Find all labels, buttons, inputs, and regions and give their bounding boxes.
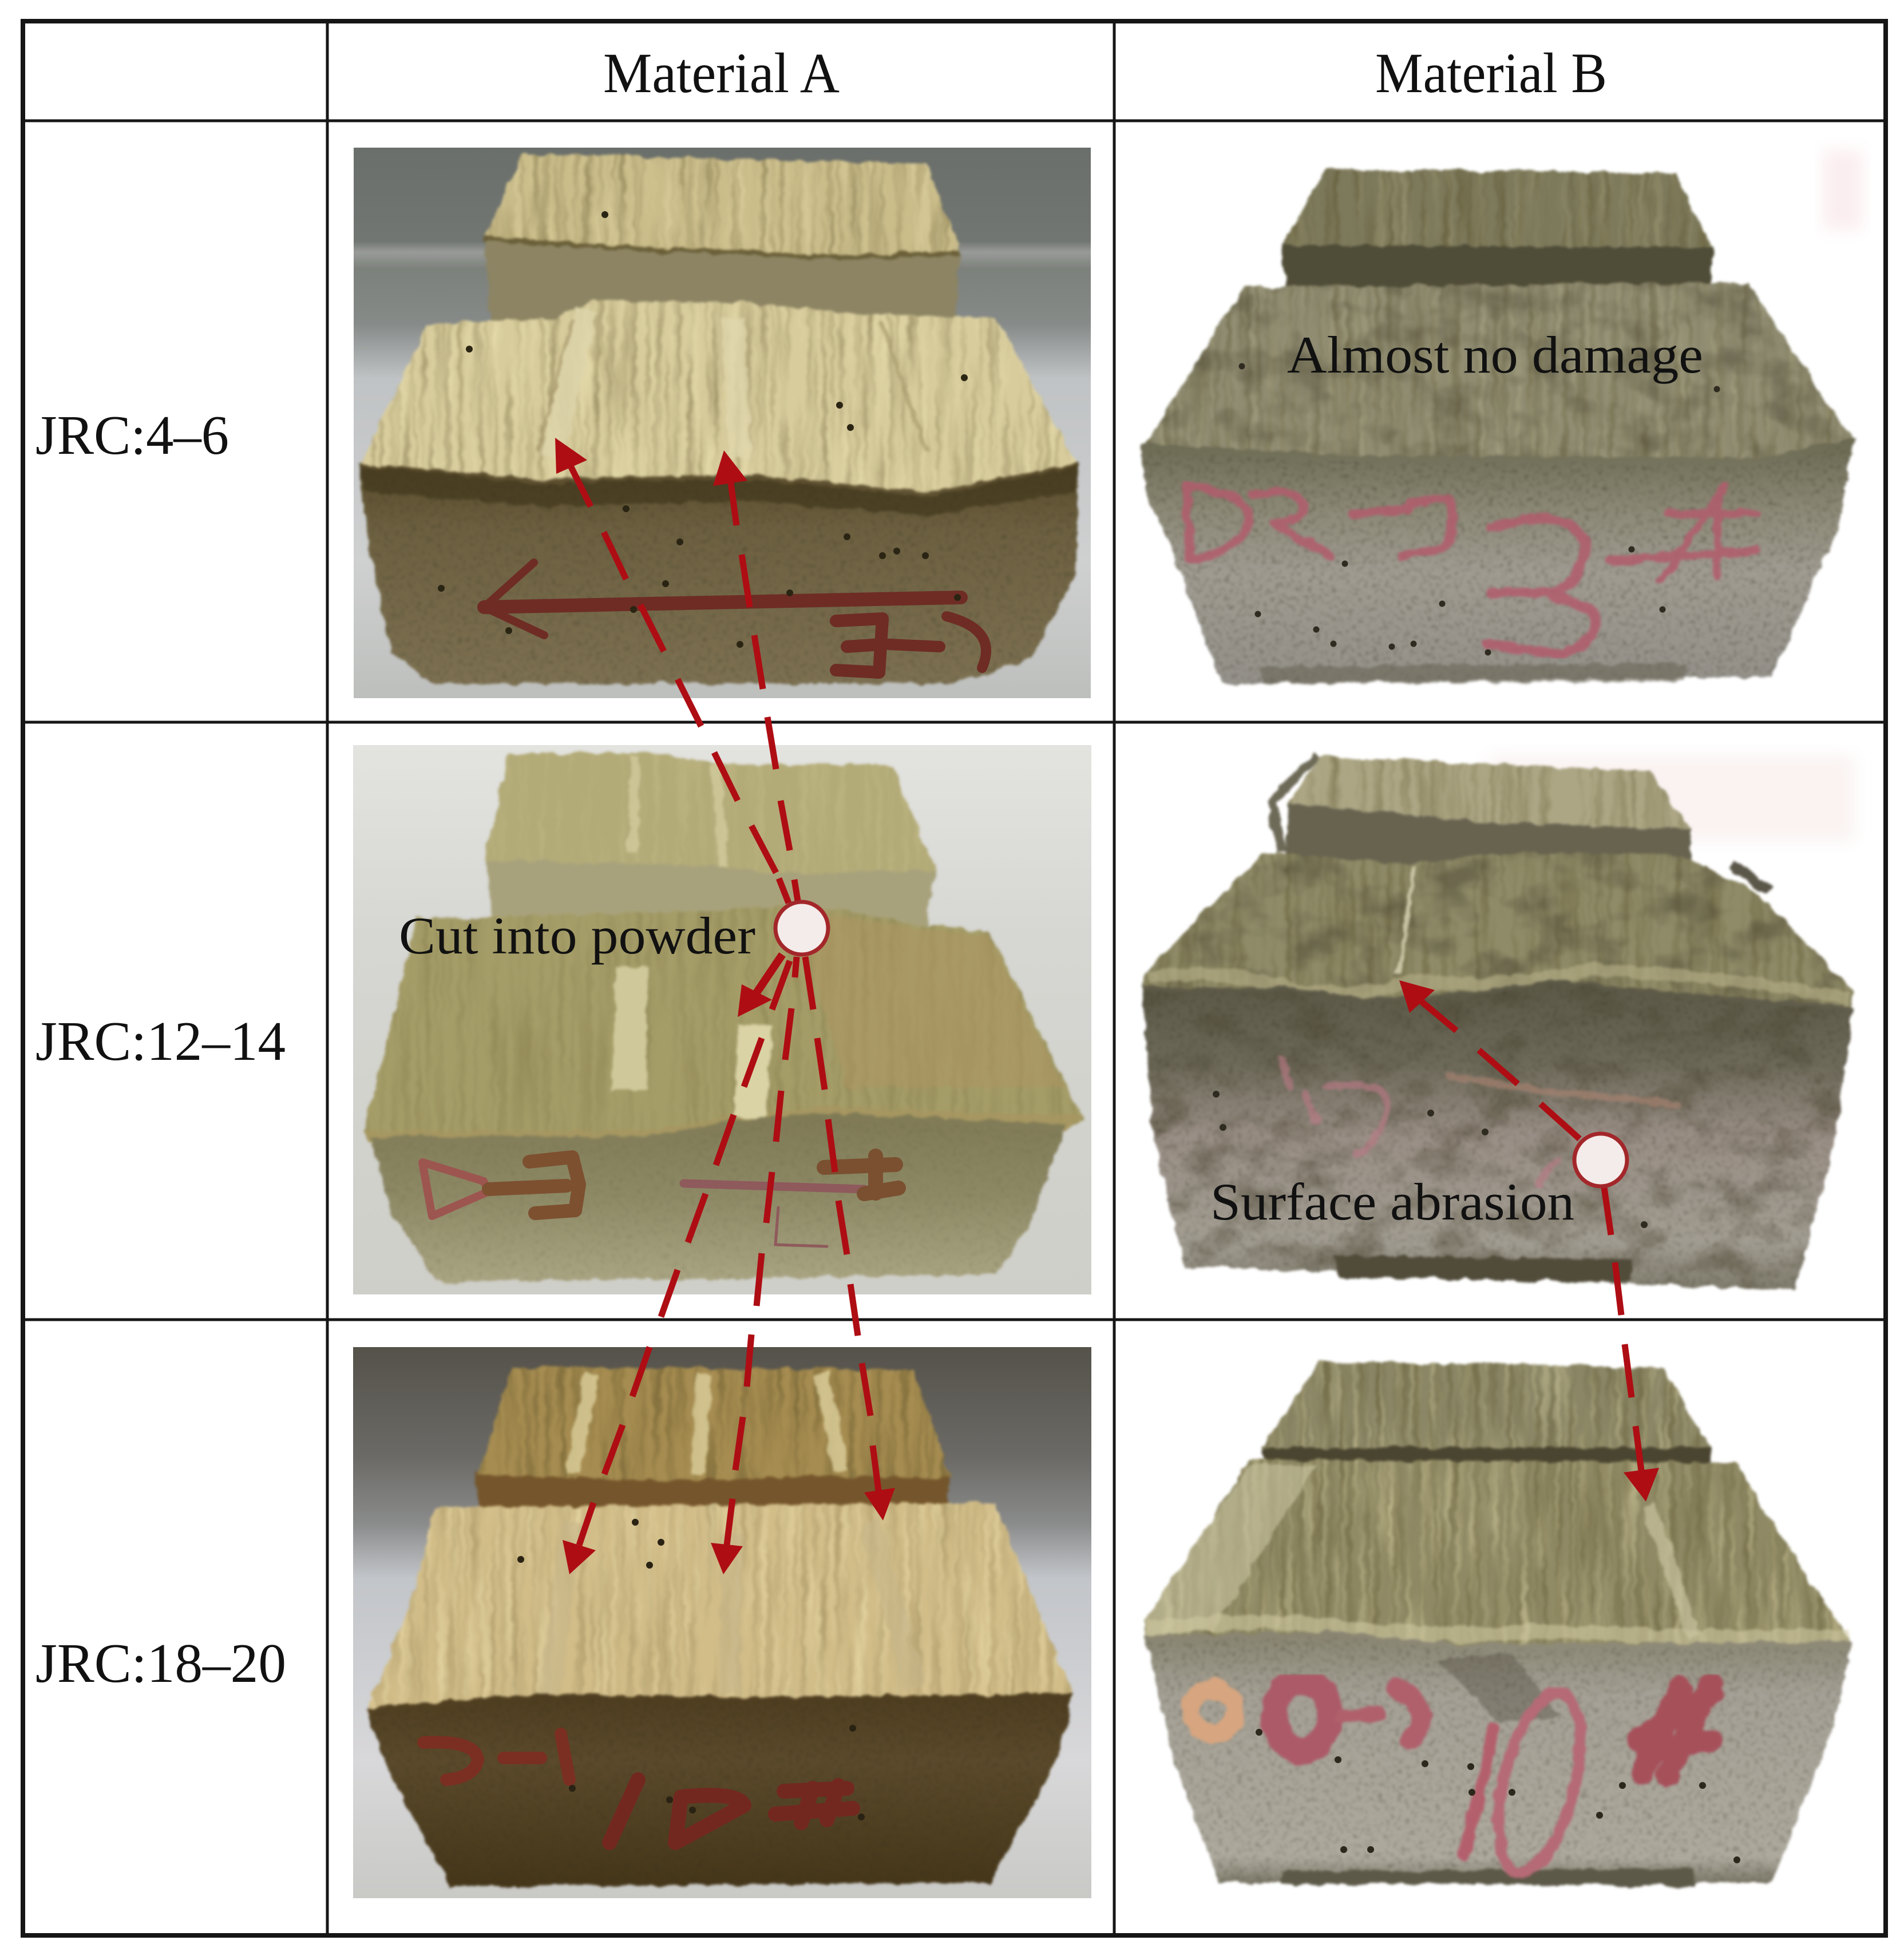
specimen pores [1259, 1732, 1737, 1860]
heading: Material A: Material A [603, 41, 840, 105]
specimen marking: 10# [609, 1780, 853, 1843]
arrow: to lower groove middle [711, 957, 797, 1574]
photo: Material B, JRC 12-14 [1142, 755, 1854, 1290]
photo: Material A, JRC 18-20 [353, 1347, 1091, 1898]
arrow: to upper groove right [713, 450, 798, 901]
callout: Almost no damage: Almost no damage [1287, 326, 1703, 384]
faint tint at photo corner [1823, 150, 1863, 230]
photo: Material A, JRC 12-14 [353, 745, 1091, 1294]
specimen pores [1216, 1094, 1644, 1225]
specimen marking: arrow and C-3 [484, 563, 986, 672]
row label: JRC 12-14: JRC:12–14 [35, 1011, 286, 1072]
row label: JRC 4-6: JRC:4–6 [35, 405, 229, 466]
photo: Material A, JRC 4-6 [354, 148, 1091, 698]
specimen pores [521, 1522, 861, 1817]
specimen marking: DB-3 3-# [1186, 486, 1756, 654]
arrow: to lower groove right [805, 957, 895, 1521]
photo: Material B, JRC 18-20 [1145, 1361, 1852, 1886]
marker: Material B origin dot [1574, 1134, 1627, 1186]
arrow: to same row groove [1399, 980, 1580, 1139]
specimen pores [1242, 366, 1717, 652]
specimen marking: D3 [422, 1157, 579, 1216]
photo: Material B, JRC 4-6 [1142, 150, 1863, 684]
arrow: short to same row groove [738, 955, 782, 1017]
row label: JRC 18-20: JRC:18–20 [35, 1633, 286, 1694]
specimen marking: faint pink strokes [1282, 1059, 1677, 1185]
arrow: to lower groove left [563, 961, 790, 1574]
arrows: Material A, cut into powder [555, 438, 895, 1574]
specimen marking: D-1 [423, 1734, 569, 1780]
faint tint at photo corner [1488, 755, 1854, 841]
callout: Cut into powder: Cut into powder [399, 906, 755, 965]
specimen pores [441, 215, 964, 644]
arrow: to lower row groove [1604, 1187, 1659, 1502]
arrows: Material B, surface abrasion [1399, 980, 1659, 1502]
specimen marking: DB-2 10# [1192, 1680, 1711, 1880]
specimen marking: 1-# [684, 1156, 898, 1246]
heading: Material B: Material B [1375, 41, 1607, 105]
arrow: to upper groove left [555, 438, 789, 903]
marker: Material A origin dot [775, 902, 828, 955]
callout: Surface abrasion: Surface abrasion [1210, 1173, 1574, 1231]
